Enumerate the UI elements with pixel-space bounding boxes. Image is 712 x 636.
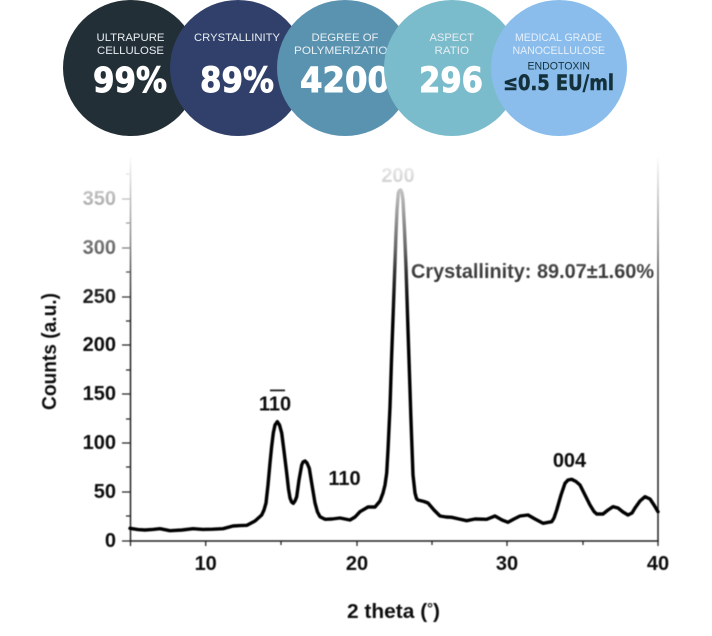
y axis tick labels: 0 xyxy=(105,530,116,552)
stat circle: ultrapure cellulose xyxy=(63,0,199,136)
y axis tick labels: 250 xyxy=(83,286,116,308)
stat circle: medical grade nanocellulose endotoxin: ENDOTOXIN xyxy=(528,60,590,72)
x axis tick labels: 30 xyxy=(496,553,518,575)
peak label: 1-10 with overbar: 110 xyxy=(259,394,291,416)
stat circle: crystallinity: CRYSTALLINITY xyxy=(194,32,281,44)
x axis tick labels: 40 xyxy=(647,553,669,575)
stat circle: degree of polymerization: DEGREE OF xyxy=(312,32,379,44)
y axis tick labels: 100 xyxy=(83,432,116,454)
x axis tick labels xyxy=(195,553,669,575)
stat circle: medical grade nanocellulose endotoxin: ≤0.5 EU/ml xyxy=(503,71,614,95)
diffraction curve xyxy=(130,190,658,531)
y axis tick labels: 150 xyxy=(83,383,116,405)
stat circle: degree of polymerization: 4200 xyxy=(300,61,390,101)
y axis title: Counts (a.u.) xyxy=(39,293,61,410)
stat circle: medical grade nanocellulose endotoxin: MEDICAL GRADE xyxy=(515,32,602,44)
stat circle: medical grade nanocellulose endotoxin xyxy=(491,0,627,136)
stat circle: aspect ratio: RATIO xyxy=(434,45,469,57)
x axis tick labels: 10 xyxy=(195,553,217,575)
x axis title: ° xyxy=(427,600,433,616)
x axis title: 2 theta ( xyxy=(347,601,424,623)
y axis tick labels xyxy=(83,188,116,552)
y axis tick labels: 50 xyxy=(94,481,116,503)
y axis tick labels: 300 xyxy=(83,237,116,259)
XRD chart xyxy=(39,150,670,623)
chart axes and ticks xyxy=(122,157,658,546)
stat circle: ultrapure cellulose: ULTRAPURE xyxy=(96,32,164,44)
stat circle: ultrapure cellulose: 99% xyxy=(93,61,167,101)
stat circle: ultrapure cellulose: CELLULOSE xyxy=(97,45,164,57)
stat circle: crystallinity: 89% xyxy=(200,61,274,101)
y axis tick labels: 350 xyxy=(83,188,116,210)
stat circle: degree of polymerization xyxy=(277,0,413,136)
crystallinity annotation: Crystallinity: 89.07±1.60% xyxy=(411,261,654,283)
stat circle: aspect ratio: ASPECT xyxy=(430,32,474,44)
stat circle: crystallinity xyxy=(170,0,306,136)
peak label: 004: 004 xyxy=(553,450,587,472)
peak label: 110: 110 xyxy=(328,468,361,490)
stat circle: degree of polymerization: POLYMERIZATION xyxy=(294,45,396,57)
y axis tick labels: 200 xyxy=(83,334,116,356)
stat circle: medical grade nanocellulose endotoxin: NANOCELLULOSE xyxy=(512,45,605,57)
stat circle: aspect ratio xyxy=(384,0,520,136)
stat circle: aspect ratio: 296 xyxy=(419,61,483,101)
stat circles row xyxy=(63,0,627,136)
x axis title: ) xyxy=(433,601,440,623)
x axis tick labels: 20 xyxy=(346,553,368,575)
peak label: 200: 200 xyxy=(381,165,415,187)
